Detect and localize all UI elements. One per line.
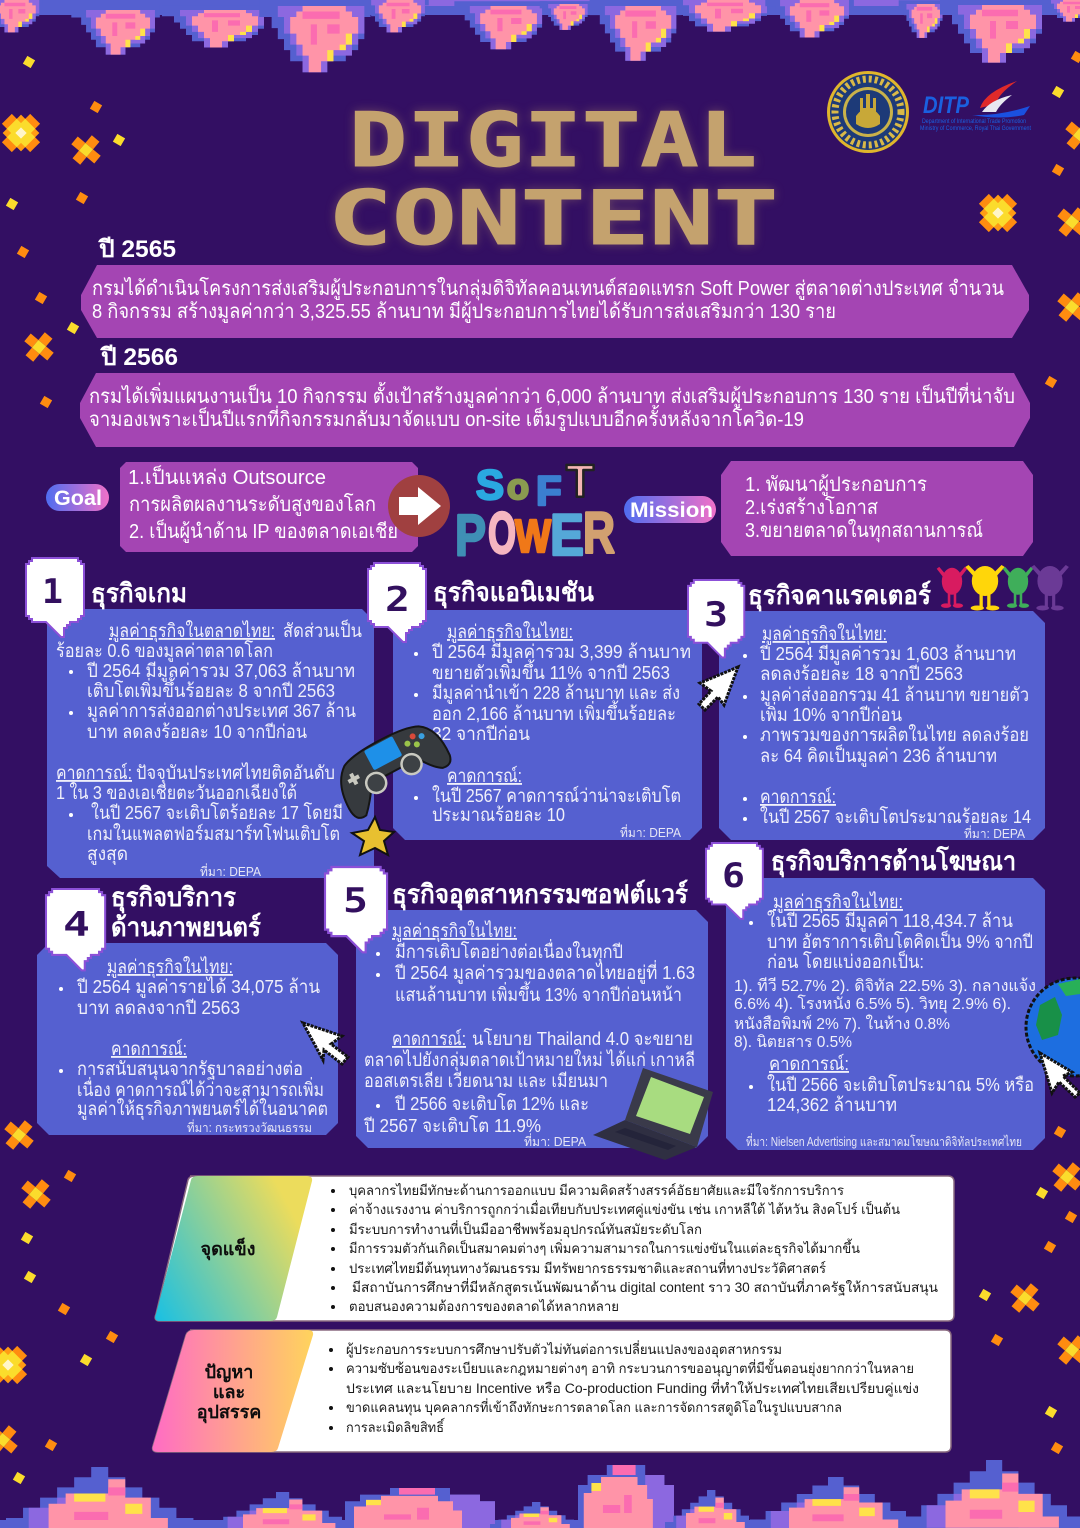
heading: film: ธุรกิจบริการ (111, 882, 236, 914)
body text: advertising: ในปี 2565 มีมูลค่า 118,434.7 ล้าน (767, 910, 1013, 932)
strengths list: ค่าจ้างแรงงาน ค่าบริการถูกกว่าเมื่อเทียบกับประเทศคู่แข่งขัน เช่น เกาหลีใต้ ไต้หวัน สิงคโปร์ เป็นต้น (349, 1200, 900, 1218)
logo: DITP: DITP (923, 92, 970, 119)
panel 5: software industry (356, 879, 708, 1149)
body text: film: เนื่อง คาดการณ์ได้ว่าจะสามารถเพิ่ม (77, 1077, 324, 1100)
body text: animation: ที่มา: DEPA (620, 824, 682, 840)
panel: mission: 1. พัฒนาผู้ประกอบการ (745, 474, 927, 497)
body text: character: มูลค่าธุรกิจในไทย: (762, 623, 887, 646)
body text: character: ละ 64 คิดเป็นมูลค่า 236 ล้านบาท (760, 743, 997, 767)
goal label: Goal (54, 487, 102, 510)
body text: software: ออสเตรเลีย เวียดนาม และ เมียนมา (364, 1070, 608, 1091)
body text: game: 1 ใน 3 ของเอเชียตะวันออกเฉียงใต้ (56, 782, 297, 803)
body text: film (59, 956, 328, 1135)
body text: character: คาดการณ์: (760, 786, 836, 807)
panel 3: character business (719, 580, 1045, 841)
number bubble 6: 6 (722, 856, 745, 896)
logo: DITP: Department of International Trade Promotion (922, 118, 1026, 125)
problems list: ขาดแคลนทุน บุคคลากรที่เข้าถึงทักษะการตลาดโลก และการจัดการสตูดิโอในรูปแบบสากล (346, 1398, 842, 1416)
panel: strengths (155, 1176, 954, 1321)
body text: software: ปี 2566 จะเติบโต 12% และ (394, 1093, 589, 1114)
body text: game: เกมในแพลตฟอร์มสมาร์ทโฟนเติบโต (87, 823, 340, 844)
problems label: และ (213, 1382, 245, 1402)
body text: software: นโยบาย Thailand 4.0 จะขยาย (472, 1028, 693, 1049)
panel: goal: 1.เป็นแหล่ง Outsource (128, 464, 326, 489)
heading: year 2566: ปี 2566 (100, 344, 178, 371)
number bubble 5 (325, 867, 387, 952)
heading: advertising: ธุรกิจบริการด้านโฆษณา (771, 845, 1016, 878)
panel: mission: 2.เร่งสร้างโอกาส (745, 496, 878, 519)
body text: software: ที่มา: DEPA (524, 1133, 587, 1149)
panel: year 2565 (81, 265, 1029, 338)
body text: game: สัดส่วนเป็น (283, 618, 362, 641)
body text: character: ในปี 2567 จะเติบโตประมาณร้อยละ 14 (760, 806, 1031, 827)
icon: characters (937, 565, 1069, 610)
body text: game: มูลค่าการส่งออกต่างประเทศ 367 ล้าน (87, 700, 356, 722)
body text: character: มูลค่าส่งออกรวม 41 ล้านบาท ขยายตัว (760, 684, 1029, 706)
problems label: อุปสรรค (197, 1402, 261, 1424)
heading: character: ธุรกิจคาแรคเตอร์ (748, 580, 931, 612)
body text: advertising: 6.6% 4). โรงหนัง 6.5% 5). วิทยุ 2.9% 6). (734, 994, 1011, 1014)
icon: cursor panel 4 (303, 1023, 348, 1064)
panel 2: animation business (393, 577, 702, 840)
body text: software: แสนล้านบาท เพิ่มขึ้น 13% จากปีก่อนหน้า (395, 981, 682, 1005)
number bubble 3 (688, 580, 744, 657)
body text: advertising: บาท อัตราการเติบโตคิดเป็น 9% จากปี (767, 929, 1033, 952)
panel 4: film services (37, 882, 338, 1135)
icon: star (352, 817, 394, 855)
panel: goal (120, 462, 418, 552)
arrow in circle (388, 475, 450, 537)
body text: game: ในปี 2567 จะเติบโตร้อยละ 17 โดยมี (91, 802, 343, 823)
heading: game: ธุรกิจเกม (91, 578, 187, 610)
soft power logo: R (583, 501, 615, 566)
problems list: ความซับซ้อนของระเบียบและกฎหมายต่างๆ อาทิ กระบวนการขออนุญาตที่มีขั้นตอนยุ่งยากกว่าในหลาย (346, 1358, 914, 1377)
body text: animation: 32 จากปีก่อน (432, 723, 530, 744)
title: DIGITAL (349, 96, 757, 184)
body text: animation: มีมูลค่านำเข้า 228 ล้านบาท และ ส่ง (432, 682, 680, 704)
body text: advertising: 124,362 ล้านบาท (767, 1094, 897, 1115)
body text: advertising: 8). นิตยสาร 0.5% (734, 1034, 852, 1051)
body text: game: คาดการณ์: (56, 762, 132, 783)
problems list: ประเทศ และนโยบาย Incentive หรือ Co-production Funding ที่ทำให้ประเทศไทยเสียเปรียบคู่แข่ง (346, 1379, 919, 1397)
strengths list: มีระบบการทำงานที่เป็นมืออาชีพพร้อมอุปกรณ์ทันสมัยระดับโลก (349, 1220, 702, 1238)
icon: game controller (328, 714, 457, 821)
soft power logo: S (476, 461, 504, 508)
number bubble 2: 2 (385, 580, 410, 620)
soft power logo: O (488, 501, 516, 566)
body text: software (363, 920, 695, 1149)
goal label (46, 484, 109, 511)
problems list: การละเมิดลิขสิทธิ์ (346, 1417, 446, 1435)
body text: game: บาท ลดลงร้อยละ 10 จากปีก่อน (87, 721, 307, 742)
strengths label (155, 1176, 312, 1321)
title (328, 96, 778, 262)
strengths list: มีสถาบันการศึกษาที่มีหลักสูตรเน้นพัฒนาด้าน digital content ราว 30 สถาบันที่ภาครัฐให้การสนับสนุน (352, 1278, 938, 1296)
panel: goal: การผลิตผลงานระดับสูงของโลก (129, 493, 376, 517)
heading: animation: ธุรกิจแอนิเมชัน (433, 577, 594, 609)
heading: film: ด้านภาพยนตร์ (111, 912, 261, 942)
panel: year 2566: จามองเพราะเป็นปีแรกที่กิจกรรมกลับมาจัดแบบ on-site เต็มรูปแบบอีกครั้งหลังจากโควิด-19 (89, 405, 804, 432)
strengths list (331, 1182, 938, 1314)
body text: character: เพิ่ม 10% จากปีก่อน (760, 702, 902, 725)
body text: character: ลดลงร้อยละ 18 จากปี 2563 (760, 663, 963, 684)
problems label (153, 1330, 313, 1452)
body text: animation: มูลค่าธุรกิจในไทย: (447, 621, 573, 644)
heading: software: ธุรกิจอุตสาหกรรมซอฟต์แวร์ (392, 879, 688, 911)
body text: film: บาท ลดลงจากปี 2563 (77, 997, 240, 1018)
title: CONTENT (328, 174, 778, 262)
body text: game: สูงสุด (87, 843, 128, 866)
number bubble 2 (368, 563, 426, 642)
soft power logo: E (550, 503, 584, 568)
body text: film: มูลค่าธุรกิจในไทย: (107, 956, 233, 979)
number bubble 1: 1 (42, 572, 63, 612)
body text: animation: ในปี 2567 คาดการณ์ว่าน่าจะเติบโต (432, 785, 681, 806)
body text: animation: ออก 2,166 ล้านบาท เพิ่มขึ้นร้อยละ (432, 700, 676, 724)
body text: character (743, 623, 1031, 841)
body text: character: ที่มา: DEPA (964, 825, 1026, 841)
body text: film: มูลค่าให้ธุรกิจภาพยนตร์ได้ในอนาคต (77, 1098, 328, 1121)
body text: game: ร้อยละ 0.6 ของมูลค่าตลาดโลก (56, 640, 273, 662)
body text: film: ปี 2564 มูลค่ารายได้ 34,075 ล้าน (76, 976, 320, 998)
logo: DITP (920, 81, 1031, 132)
number bubble 1 (26, 558, 84, 637)
bottom pixel banner (0, 1460, 1080, 1528)
body text: game: เติบโตเพิ่มขึ้นร้อยละ 8 จากปี 2563 (87, 677, 335, 701)
soft power logo: T (566, 455, 594, 507)
body text: software: ปี 2564 มูลค่ารวมของตลาดไทยอยู่ที่ 1.63 (394, 960, 695, 984)
soft power logo (455, 455, 615, 568)
panel: problems (153, 1330, 951, 1452)
strengths list: บุคลากรไทยมีทักษะด้านการออกแบบ มีความคิดสร้างสรรค์อัธยาศัยและมีใจรักการบริการ (349, 1182, 844, 1199)
body text: animation: ปี 2564 มีมูลค่ารวม 3,399 ล้านบาท (431, 641, 691, 663)
heading: film (111, 882, 261, 942)
body text: game: มูลค่าธุรกิจในตลาดไทย: (109, 620, 275, 643)
body text: animation: คาดการณ์: (447, 765, 522, 786)
panel: year 2565: กรมได้ดำเนินโครงการส่งเสริมผู้ประกอบการในกลุ่มดิจิทัลคอนเทนต์สอดแทรก Soft Power สู่ตลาดต่างประเทศ จำนวน (92, 277, 1004, 301)
heading: year 2565: ปี 2565 (98, 236, 176, 263)
strengths list: ตอบสนองความต้องการของตลาดได้หลากหลาย (349, 1299, 619, 1314)
body text: software: คาดการณ์: (392, 1028, 466, 1049)
body text: advertising: มูลค่าธุรกิจในไทย: (773, 891, 903, 914)
panel: goal: 2. เป็นผู้นำด้าน IP ของตลาดเอเชีย (129, 518, 398, 544)
number bubble 6 (706, 843, 763, 919)
panel: mission (721, 461, 1033, 556)
mission label: Mission (630, 499, 713, 522)
panel: mission: 3.ขยายตลาดในทุกสถานการณ์ (745, 519, 983, 543)
icon: laptop (593, 1068, 713, 1160)
body text: animation: ประมาณร้อยละ 10 (432, 804, 565, 825)
body text: character: ปี 2564 มีมูลค่ารวม 1,603 ล้านบาท (759, 643, 1016, 665)
body text: game: ปัจจุบันประเทศไทยติดอันดับ (136, 762, 335, 785)
body text: game (56, 618, 362, 879)
body text: film: คาดการณ์: (111, 1038, 187, 1059)
soft power logo: W (515, 510, 551, 562)
problems list: ผู้ประกอบการระบบการศึกษาปรับตัวไม่ทันต่อการเปลี่ยนแปลงของอุตสาหกรรม (346, 1340, 782, 1358)
body text: game: ที่มา: DEPA (200, 863, 262, 879)
body text: film: การสนับสนุนจากรัฐบาลอย่างต่อ (77, 1058, 303, 1081)
body text: advertising: หนังสือพิมพ์ 2% 7). ในห้าง 0.8% (734, 1014, 950, 1033)
top pixel banner (0, 0, 1080, 72)
body text: advertising: ที่มา: Nielsen Advertising และสมาคมโฆษณาดิจิทัลประเทศไทย (746, 1133, 1022, 1149)
body text: advertising: ในปี 2566 จะเติบโตประมาณ 5% หรือ (767, 1074, 1034, 1095)
body text: advertising (734, 891, 1036, 1149)
number bubble 4: 4 (63, 905, 90, 945)
strengths label: จุดแข็ง (201, 1237, 255, 1261)
body text: software: ตลาดไปยังกลุ่มตลาดเป้าหมายใหม่ ได้แก่ เกาหลี (364, 1049, 695, 1072)
body text: animation: ขยายตัวเพิ่มขึ้น 11% จากปี 2563 (432, 659, 670, 683)
body text: software: ปี 2567 จะเติบโต 11.9% (363, 1115, 541, 1136)
panel: year 2565: 8 กิจกรรม สร้างมูลค่ากว่า 3,325.55 ล้านบาท มีผู้ประกอบการไทยได้รับการส่งเสริมกว่า 130 ราย (92, 300, 836, 324)
soft power logo: F (536, 467, 562, 514)
strengths list: ประเทศไทยมีต้นทุนทางวัฒนธรรม มีทรัพยากรธรรมชาติและสถานที่ทางประวัติศาสตร์ (349, 1259, 826, 1277)
strengths list: มีการรวมตัวกันเกิดเป็นสมาคมต่างๆ เพิ่มความสามารถในการแข่งขันในแต่ละธุรกิจได้มากขึ้น (349, 1238, 860, 1257)
body text: game: ปี 2564 มีมูลค่ารวม 37,063 ล้านบาท (86, 660, 355, 682)
body text: advertising: 1). ทีวี 52.7% 2). ดิจิทัล 22.5% 3). กลางแจ้ง (734, 977, 1036, 995)
body text: software: มีการเติบโตอย่างต่อเนื่องในทุกปี (395, 939, 623, 964)
number bubble 4 (46, 889, 105, 970)
icon: cursor panel 3 (699, 667, 738, 710)
number bubble 3: 3 (704, 595, 728, 635)
body text: software: มูลค่าธุรกิจในไทย: (392, 920, 517, 943)
body text: animation (414, 621, 691, 840)
logo: DITP: Ministry of Commerce, Royal Thai Government (920, 125, 1031, 132)
body text: advertising: ก่อน โดยแบ่งออกเป็น: (767, 949, 924, 972)
number bubble 5: 5 (343, 881, 368, 921)
panel 6: advertising services (726, 845, 1045, 1150)
panel 1: game business (47, 578, 374, 879)
problems list (329, 1340, 919, 1435)
body text: character: ภาพรวมของการผลิตในไทย ลดลงร้อย (760, 724, 1029, 745)
problems label: ปัญหา (205, 1362, 253, 1383)
soft power logo: o (507, 466, 529, 507)
body text: film: ที่มา: กระทรวงวัฒนธรรม (187, 1119, 312, 1135)
soft power logo: P (455, 503, 486, 568)
logo: ministry seal (827, 71, 909, 153)
panel: year 2566: กรมได้เพิ่มแผนงานเป็น 10 กิจกรรม ตั้งเป้าสร้างมูลค่ากว่า 6,000 ล้านบาท ส่งเสริมผู้ประกอบการ 130 ราย เป็นปีที่น่าจับ (89, 382, 1015, 409)
body text: advertising: คาดการณ์: (769, 1053, 849, 1074)
icon: globe (1026, 978, 1080, 1076)
panel: year 2566 (80, 373, 1030, 447)
icon: cursor on globe (1040, 1053, 1080, 1097)
